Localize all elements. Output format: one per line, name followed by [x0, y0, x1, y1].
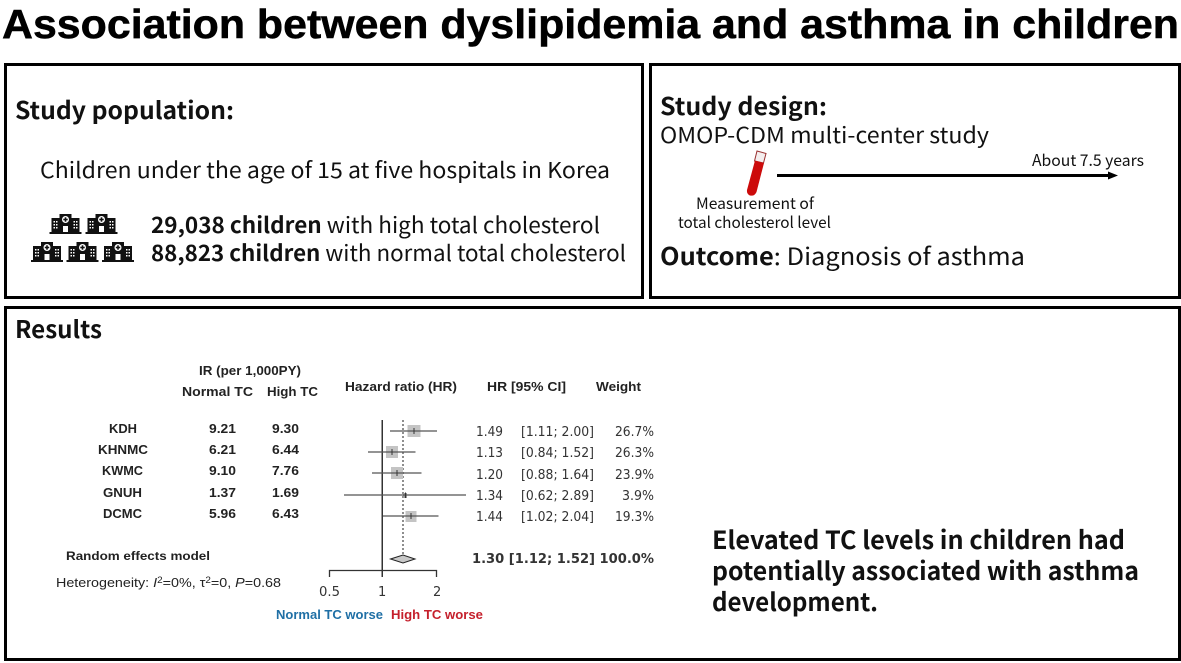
table: HR values: 1.44 — [476, 510, 503, 525]
text: heterogeneity: 2 — [157, 575, 163, 585]
heading: study design: Study design: — [660, 87, 827, 122]
table: hospital rows: 9.10 — [209, 464, 236, 478]
table: HR values: 1.49 — [476, 425, 503, 440]
text: heterogeneity: Heterogeneity: I — [56, 575, 157, 590]
table: hospital rows: 9.21 — [209, 422, 236, 436]
text: population description: Children under the age of 15 at five hospitals in Korea — [40, 153, 610, 185]
forest row: KWMC — [372, 467, 422, 479]
text: measurement label: Measurement of — [696, 192, 815, 214]
text: study type: OMOP-CDM multi-center study — [660, 118, 990, 150]
forest plot — [276, 380, 483, 622]
panel: results — [6, 308, 1180, 660]
table: HR values: [0.84; 1.52] — [521, 446, 594, 461]
conclusion: potentially associated with asthma — [712, 552, 1139, 588]
conclusion — [712, 521, 1139, 619]
x axis — [330, 570, 436, 577]
text: high cholesterol count: 29,038 children with high total cholesterol — [151, 208, 600, 240]
axis labels: 0.5 — [319, 585, 340, 600]
table: hospital rows: KWMC — [102, 464, 143, 478]
table: hospital rows: 9.30 — [272, 422, 299, 436]
icon: blood tube — [747, 151, 766, 196]
table header: incidence rate: IR (per 1,000PY) — [199, 364, 301, 378]
table: hospital rows: 1.37 — [209, 486, 236, 500]
forest row: KDH — [390, 425, 437, 437]
conclusion: development. — [712, 583, 878, 619]
text: normal cholesterol count: 88,823 children with normal total cholesterol — [151, 236, 626, 268]
table header: incidence rate: Normal TC — [182, 385, 253, 399]
text: heterogeneity: =0%, τ — [163, 575, 206, 590]
table: HR values: 23.9% — [615, 468, 654, 483]
table: hospital rows — [98, 422, 299, 521]
forest header: Hazard ratio (HR) — [345, 380, 457, 394]
table: HR values — [476, 425, 654, 525]
forest row: GNUH — [344, 492, 466, 498]
text: heterogeneity: P=0.68 — [235, 575, 278, 590]
table: HR values: [0.62; 2.89] — [521, 489, 594, 504]
table header: HR and weight: Weight — [596, 380, 642, 394]
table: pooled estimate: 1.30 [1.12; 1.52] 100.0% — [472, 552, 654, 567]
panel: study design — [650, 64, 1180, 298]
direction labels — [276, 608, 483, 622]
table: HR values: 19.3% — [615, 510, 654, 525]
table: HR values: [0.88; 1.64] — [521, 468, 594, 483]
direction labels: Normal TC worse — [276, 608, 383, 622]
text: heterogeneity: 2 — [205, 575, 211, 585]
table: HR values: 1.34 — [476, 489, 503, 504]
table: hospital rows: 6.21 — [209, 443, 236, 457]
table: hospital rows: KDH — [109, 422, 137, 436]
table: HR values: [1.11; 2.00] — [521, 425, 594, 440]
title: Association between dyslipidemia and asthma in children — [2, 1, 1179, 47]
forest row: DCMC — [383, 511, 438, 522]
text: outcome: Outcome : Diagnosis of asthma — [660, 237, 1025, 272]
table: hospital rows: 7.76 — [272, 464, 299, 478]
conclusion: Elevated TC levels in children had — [712, 521, 1125, 557]
table: hospital rows: 5.96 — [209, 507, 236, 521]
table: hospital rows: KHNMC — [98, 443, 148, 457]
table: HR values: 3.9% — [622, 489, 654, 504]
axis labels: 1 — [378, 585, 386, 600]
forest row: KHNMC — [368, 446, 416, 458]
table: hospital rows: DCMC — [103, 507, 142, 521]
table: HR values: 26.7% — [615, 425, 654, 440]
direction labels: High TC worse — [391, 608, 483, 622]
table header: incidence rate — [182, 364, 318, 399]
table: hospital rows: 6.43 — [272, 507, 299, 521]
axis labels: 2 — [433, 585, 441, 600]
label: random effects model: Random effects model — [66, 549, 210, 563]
icons: two hospitals — [50, 214, 118, 234]
table header: HR and weight — [487, 380, 642, 394]
table: HR values: 1.20 — [476, 468, 503, 483]
table: HR values: 1.13 — [476, 446, 503, 461]
text: measurement label — [678, 192, 831, 233]
text: follow-up duration: About 7.5 years — [1032, 147, 1144, 171]
table: HR values: [1.02; 2.04] — [521, 510, 594, 525]
table: hospital rows: GNUH — [103, 486, 142, 500]
heading: study population: Study population: — [15, 91, 234, 126]
table: hospital rows: 1.69 — [272, 486, 299, 500]
table header: incidence rate: High TC — [267, 385, 318, 399]
text: heterogeneity: =0, — [211, 575, 235, 590]
heading: results: Results — [15, 310, 102, 345]
panel: study population — [6, 64, 642, 298]
axis labels — [319, 585, 441, 600]
text: measurement label: total cholesterol level — [678, 211, 831, 233]
table header: HR and weight: HR [95% CI] — [487, 380, 566, 394]
table: hospital rows: 6.44 — [272, 443, 299, 457]
icons: three hospitals — [31, 242, 134, 262]
arrow: follow-up timeline — [777, 172, 1118, 180]
pooled diamond — [390, 555, 415, 563]
table: HR values: 26.3% — [615, 446, 654, 461]
